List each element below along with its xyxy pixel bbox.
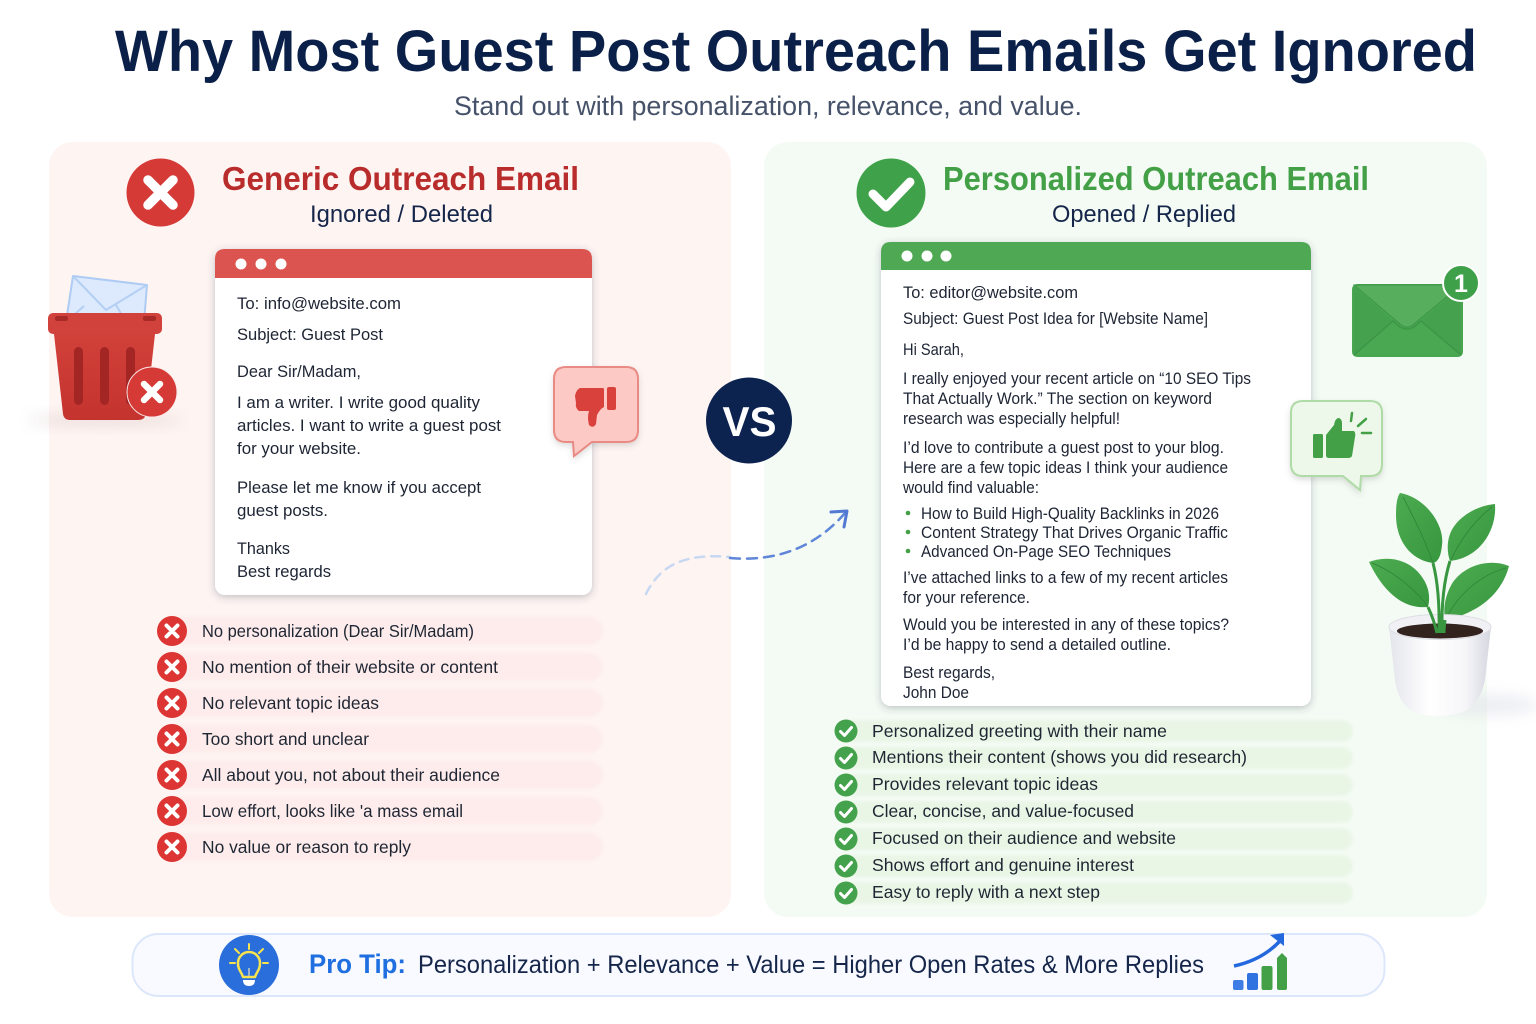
subheading: ignored / deleted: Ignored / Deleted bbox=[310, 201, 493, 228]
checklist: generic problems: No personalization (Dear Sir/Madam) bbox=[202, 621, 474, 641]
checklist: personalized strengths: Focused on their audience and website bbox=[872, 828, 1176, 848]
icon: green check badge bbox=[856, 158, 926, 228]
email text: personalized: To: editor@website.com bbox=[903, 284, 1078, 302]
icon: light bulb bbox=[219, 935, 279, 995]
icon: thumbs down bubble bbox=[554, 367, 638, 456]
email text: personalized bbox=[902, 284, 1251, 702]
icon: potted plant bbox=[1369, 493, 1536, 716]
checklist: personalized strengths: Clear, concise, and value-focused bbox=[872, 801, 1134, 821]
email text: personalized: That Actually Work.” The section on keyword bbox=[903, 390, 1212, 408]
email text: generic: articles. I want to write a guest post bbox=[237, 416, 501, 435]
panel: generic outreach email bbox=[27, 142, 731, 917]
checklist: generic problems: No mention of their website or content bbox=[202, 657, 498, 677]
email text: personalized: I’d be happy to send a detailed outline. bbox=[903, 636, 1171, 654]
arrow: dashed curve from generic to personalized bbox=[646, 511, 847, 594]
icon: thumbs up bubble bbox=[1291, 401, 1382, 490]
email text: personalized: John Doe bbox=[903, 684, 969, 702]
pro tip bar bbox=[132, 933, 1384, 996]
title: Why Most Guest Post Outreach Emails Get Ignored bbox=[115, 19, 1477, 84]
email text: personalized: Here are a few topic ideas I think your audience bbox=[903, 459, 1228, 477]
email card: generic bbox=[215, 249, 592, 595]
email card: personalized bbox=[881, 242, 1311, 706]
checklist: generic problems: Too short and unclear bbox=[202, 729, 369, 749]
email text: generic: Thanks bbox=[237, 539, 290, 558]
email text: personalized: I really enjoyed your recent article on “10 SEO Tips bbox=[903, 370, 1251, 388]
heading: generic outreach email: Generic Outreach Email bbox=[222, 160, 579, 197]
email text: generic: Dear Sir/Madam, bbox=[237, 362, 361, 381]
icon: growth chart bbox=[1233, 933, 1287, 990]
panel: personalized outreach email bbox=[764, 142, 1536, 917]
subheading: opened / replied: Opened / Replied bbox=[1052, 201, 1236, 228]
email text: personalized: I’d love to contribute a guest post to your blog. bbox=[903, 439, 1224, 457]
checklist: generic problems: No relevant topic ideas bbox=[202, 693, 379, 713]
email text: generic: for your website. bbox=[237, 439, 361, 458]
checklist: personalized strengths: Easy to reply with a next step bbox=[872, 882, 1100, 902]
icon: green envelope with badge: 1 bbox=[1454, 270, 1468, 298]
pro tip formula: Personalization + Relevance + Value = Higher Open Rates & More Replies bbox=[418, 951, 1204, 979]
email text: generic: Please let me know if you accept bbox=[237, 478, 481, 497]
pro tip label: Pro Tip: bbox=[309, 949, 406, 979]
checklist: generic problems: No value or reason to reply bbox=[202, 837, 411, 857]
email text: personalized: would find valuable: bbox=[902, 479, 1039, 497]
email text: generic: guest posts. bbox=[237, 501, 328, 520]
checklist: personalized strengths: Mentions their content (shows you did research) bbox=[872, 747, 1247, 767]
checklist: generic problems: All about you, not about their audience bbox=[202, 765, 500, 785]
email text: personalized: Would you be interested in any of these topics? bbox=[903, 616, 1229, 634]
email text: personalized: Content Strategy That Drives Organic Traffic bbox=[921, 524, 1228, 542]
checklist: personalized strengths: Personalized greeting with their name bbox=[872, 721, 1167, 741]
email text: personalized: research was especially helpful! bbox=[903, 410, 1120, 428]
checklist: personalized strengths: Provides relevant topic ideas bbox=[872, 774, 1098, 794]
checklist: generic problems: Low effort, looks like 'a mass email bbox=[202, 801, 463, 821]
email text: generic: Subject: Guest Post bbox=[237, 325, 383, 344]
VS badge bbox=[706, 378, 792, 464]
heading: personalized outreach email: Personalized Outreach Email bbox=[943, 160, 1369, 197]
icon: green envelope with badge bbox=[1352, 265, 1479, 357]
email text: personalized: for your reference. bbox=[903, 589, 1030, 607]
email text: personalized: I’ve attached links to a few of my recent articles bbox=[903, 569, 1228, 587]
email text: personalized: Best regards, bbox=[903, 664, 995, 682]
email text: personalized: Hi Sarah, bbox=[903, 341, 964, 359]
email text: generic: Best regards bbox=[237, 562, 331, 581]
email text: generic: I am a writer. I write good quality bbox=[237, 393, 480, 412]
icon: red cross badge bbox=[126, 158, 194, 226]
VS badge: VS bbox=[722, 398, 776, 445]
email text: generic: To: info@website.com bbox=[237, 294, 401, 313]
email text: generic bbox=[237, 294, 501, 581]
checklist: personalized strengths: Shows effort and genuine interest bbox=[872, 855, 1134, 875]
email text: personalized: How to Build High-Quality Backlinks in 2026 bbox=[921, 505, 1219, 523]
checklist: personalized strengths bbox=[834, 720, 1353, 904]
checklist: generic problems bbox=[157, 616, 603, 862]
icon: trash bin with envelope bbox=[27, 276, 183, 425]
email text: personalized: Advanced On-Page SEO Techniques bbox=[921, 543, 1171, 561]
email text: personalized: Subject: Guest Post Idea for [Website Name] bbox=[903, 310, 1208, 328]
subtitle: Stand out with personalization, relevance, and value. bbox=[454, 91, 1082, 121]
